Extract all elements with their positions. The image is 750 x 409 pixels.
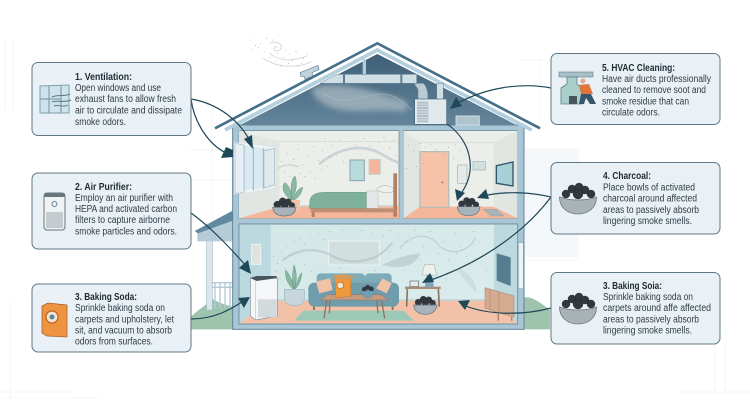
- text: baking soda: 3. Baking Soda:: [75, 291, 137, 303]
- arrow: HVAC: [450, 86, 551, 109]
- smoke swirls: [273, 230, 487, 293]
- wall TV: [496, 162, 513, 186]
- roof vent: [300, 65, 319, 79]
- attic ducts and air handler: [320, 59, 479, 125]
- plant: [284, 265, 304, 306]
- icon: charcoal bowl: [560, 183, 596, 214]
- small bowl: [361, 285, 374, 298]
- icon: air purifier: [44, 193, 65, 230]
- text: baking soda: odors from surfaces.: [75, 336, 153, 348]
- icon: HVAC technician: [559, 72, 596, 104]
- text: baking soda: Sprinkle baking soda on: [75, 303, 165, 314]
- text: ventilation: [75, 71, 182, 128]
- text: HVAC cleaning: 5. HVAC Cleaning:: [602, 62, 675, 74]
- attic smoke lines: [318, 87, 412, 111]
- plant: [283, 176, 303, 211]
- arrow: duct to charcoal: [447, 124, 470, 201]
- panel: baking soda: [32, 284, 191, 352]
- icon: open window: [40, 85, 71, 113]
- rug: [294, 311, 414, 321]
- floor charcoal bowl: [414, 296, 437, 314]
- cabinet: [485, 288, 514, 321]
- door: [420, 152, 449, 207]
- arrows: [191, 86, 551, 319]
- text: baking soda right: [603, 280, 711, 336]
- text: charcoal: charcoal around affected: [603, 194, 697, 204]
- text: charcoal: lingering smoke smells.: [603, 216, 692, 227]
- icon: charcoal bowl: [560, 293, 596, 324]
- baking soda box: [333, 274, 354, 298]
- text: charcoal: [603, 170, 699, 227]
- text: HVAC cleaning: Have air ducts professionally: [602, 74, 711, 85]
- outside smoke swirl: [250, 38, 311, 66]
- left upper room: [235, 131, 417, 218]
- text: charcoal: areas to passively absorb: [603, 205, 699, 216]
- side table and lamp: [405, 264, 441, 307]
- text: air purifier: filters to capture airborne: [75, 215, 170, 226]
- wall panels: [458, 162, 485, 183]
- arrow: charcoal upstairs: [477, 189, 551, 199]
- air purifier: [250, 276, 277, 320]
- icon: baking soda box: [42, 303, 67, 337]
- panel: baking soda right: [551, 272, 720, 344]
- floor vent: [483, 209, 504, 216]
- panel: charcoal: [551, 162, 720, 234]
- text: baking soda: carpets and upholstery, let: [75, 314, 174, 326]
- text: charcoal: 4. Charcoal:: [603, 170, 651, 182]
- text: baking soda: sit, and vacuum to absorb: [75, 326, 172, 336]
- text: baking soda: [75, 291, 174, 348]
- arrow: baking soda right: [458, 300, 551, 313]
- charcoal bowl: [273, 198, 296, 216]
- text: air purifier: [75, 181, 177, 238]
- attic: [240, 54, 517, 125]
- text: baking soda right: lingering smoke smells.: [603, 326, 692, 336]
- text: ventilation: 1. Ventilation:: [75, 71, 132, 83]
- text: HVAC cleaning: [602, 62, 711, 118]
- panel: ventilation: [32, 62, 191, 136]
- right upper room: [403, 131, 518, 218]
- text: air purifier: Employ an air purifier with: [75, 193, 173, 204]
- text: air purifier: smoke particles and odors.: [75, 226, 177, 238]
- text: HVAC cleaning: smoke residue that can: [602, 96, 689, 108]
- text: HVAC cleaning: cleaned to remove soot and: [602, 85, 706, 96]
- open window: [235, 143, 275, 193]
- house cross-section: [190, 38, 550, 329]
- text: baking soda right: areas to passively absorb: [603, 314, 699, 326]
- smoke in room: [278, 136, 417, 178]
- house structure: [190, 38, 550, 329]
- text: ventilation: air to circulate and dissipate: [75, 106, 182, 116]
- text: air purifier: HEPA and activated carbon: [75, 204, 177, 215]
- wall shell: [233, 125, 524, 329]
- charcoal bowl: [457, 197, 480, 216]
- arrow: baking soda: [191, 297, 250, 319]
- arrow: ventilation to wall: [191, 99, 233, 158]
- arrow: ventilation to window: [191, 99, 253, 149]
- living room shell: [239, 224, 523, 324]
- lower floor: [239, 224, 523, 324]
- smoke dots: [407, 143, 466, 168]
- coffee table: [321, 295, 388, 318]
- attic smoke: [312, 85, 407, 112]
- text: ventilation: exhaust fans to allow fresh: [75, 94, 176, 105]
- arrow: charcoal downstairs: [422, 197, 551, 283]
- roof: [215, 43, 540, 130]
- text: baking soda right: Sprinkle baking soda on: [603, 292, 693, 303]
- text: HVAC cleaning: circulate odors.: [602, 108, 660, 118]
- text: ventilation: Open windows and use: [75, 83, 161, 94]
- text: ventilation: smoke odors.: [75, 117, 126, 128]
- text: baking soda right: carpets around affe affected: [603, 303, 711, 314]
- panel: air purifier: [32, 173, 191, 249]
- porch: [190, 211, 550, 329]
- text: charcoal: Place bowls of activated: [603, 182, 695, 194]
- wall decor: [252, 241, 511, 286]
- text: baking soda right: 3. Baking Soia:: [603, 280, 662, 292]
- paintings: [350, 159, 380, 181]
- sofa: [308, 273, 399, 310]
- text: air purifier: 2. Air Purifier:: [75, 181, 132, 193]
- bed: [309, 173, 397, 217]
- panel: HVAC cleaning: [551, 54, 720, 124]
- arrow: air purifier: [191, 213, 251, 274]
